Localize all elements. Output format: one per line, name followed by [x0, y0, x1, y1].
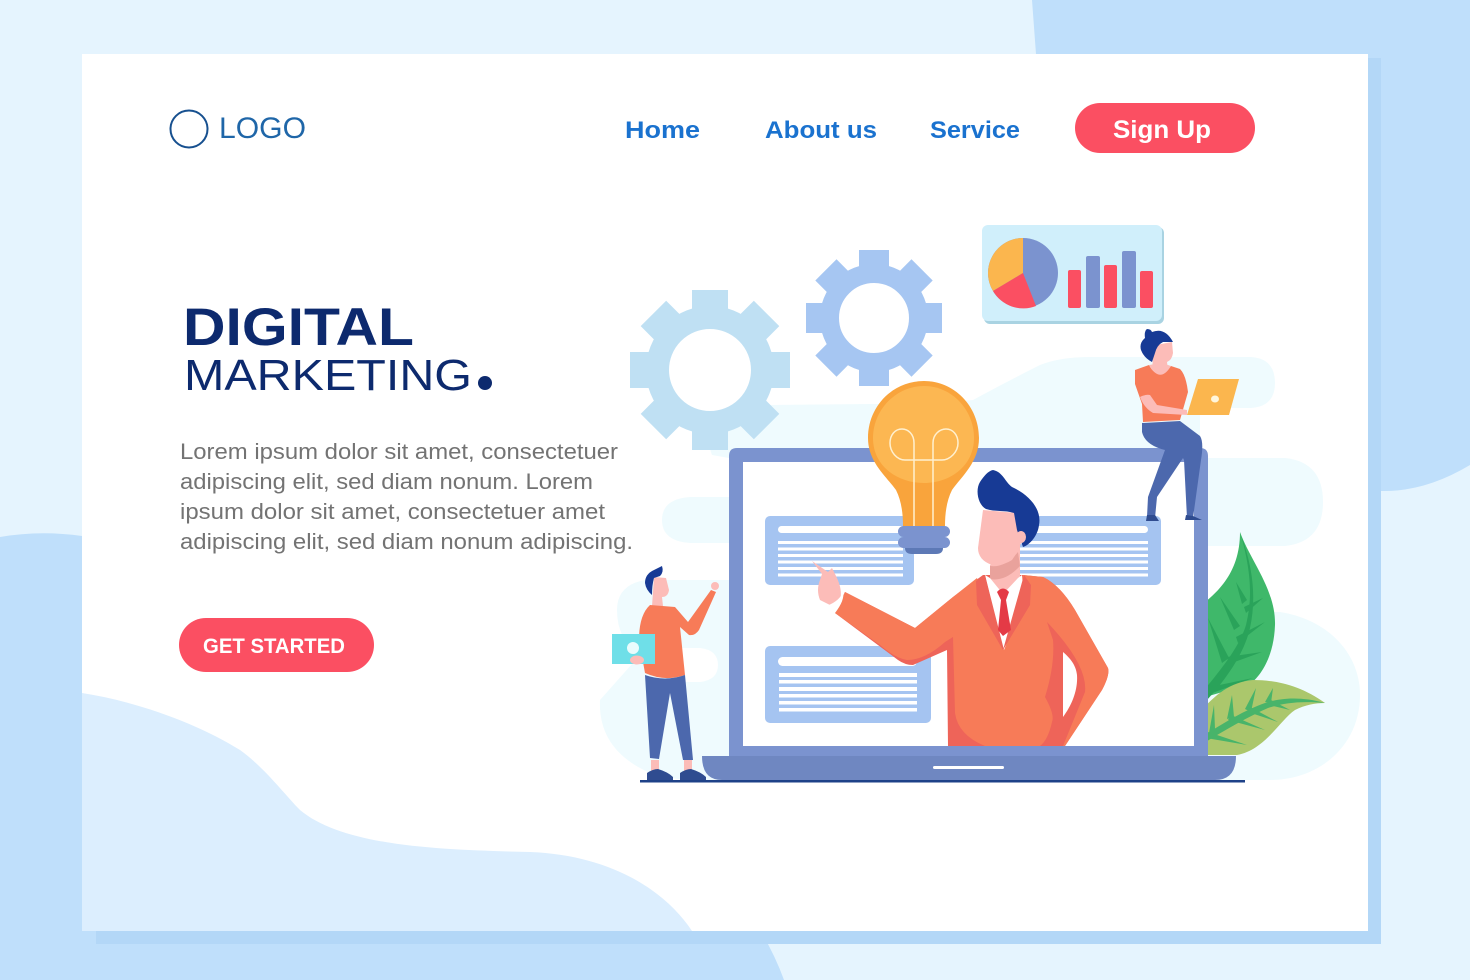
title: DIGITAL [183, 298, 414, 357]
person: standing with tablet [612, 566, 719, 780]
title: MARKETING [184, 351, 472, 400]
laptop base [702, 756, 1236, 780]
man hair [978, 470, 1039, 547]
ground line [640, 780, 1245, 782]
leaf: large green [1195, 532, 1275, 700]
sitting person trousers [1142, 421, 1202, 518]
gear: blue [806, 250, 942, 386]
laptop [640, 448, 1245, 782]
bulb glass [868, 381, 979, 526]
man lapels [976, 575, 1031, 650]
white card [82, 54, 1368, 931]
sitting person neck and face [1152, 342, 1173, 370]
navigation [625, 117, 1020, 144]
man jacket base [835, 575, 1108, 746]
standing person shoes [647, 769, 706, 780]
standing person neck and face [652, 577, 669, 606]
man face [978, 510, 1022, 565]
card blob: bottom left [82, 693, 692, 931]
body paragraph: adipiscing elit, sed diam nonum adipiscing. [180, 529, 633, 554]
text card: upper right [1012, 516, 1161, 585]
chart panel [982, 225, 1164, 324]
logo: LOGO [219, 112, 306, 145]
laptop notch [933, 766, 1004, 769]
sitting person shirt [1135, 365, 1188, 422]
white notch in backdrop near standing person [680, 648, 718, 682]
logo [170, 110, 306, 148]
man ear [1016, 531, 1026, 543]
sitting person arm [1140, 395, 1187, 415]
light bulb [868, 381, 979, 554]
tablet [612, 634, 655, 664]
laptop screen frame [729, 448, 1208, 760]
yellow laptop dot [1211, 396, 1219, 402]
standing person raised hand [711, 582, 719, 590]
tablet dot [627, 642, 639, 654]
man jacket highlight [835, 575, 1108, 746]
navigation: About us [765, 117, 877, 144]
bulb highlight [873, 386, 974, 483]
body paragraph [180, 439, 633, 554]
sitting person shoes [1146, 515, 1202, 521]
body paragraph: adipiscing elit, sed diam nonum. Lorem [180, 469, 593, 494]
standing person sweater [639, 590, 716, 678]
body paragraph: Lorem ipsum dolor sit amet, consectetuer [180, 439, 618, 464]
leaf: small lime [1200, 680, 1325, 755]
standing person trousers [645, 675, 693, 760]
sign up button: Sign Up [1113, 116, 1211, 144]
yellow laptop [1187, 379, 1239, 415]
person: sitting with laptop [1135, 329, 1239, 521]
standing person hand on tablet [630, 656, 644, 664]
bulb filament [890, 429, 958, 526]
background blob: bottom left [0, 533, 784, 980]
card shadow [96, 58, 1381, 944]
background blob: top right [1032, 0, 1470, 491]
get started button: GET STARTED [203, 635, 345, 658]
laptop screen [743, 462, 1194, 746]
sign up button [1075, 103, 1255, 153]
man cuff [829, 592, 843, 613]
sitting person hair [1140, 329, 1173, 362]
standing person hair [645, 566, 663, 595]
bulb base [898, 526, 950, 554]
title [183, 298, 492, 400]
man tie [997, 588, 1011, 636]
man hand [812, 561, 841, 605]
text card: lower [765, 646, 931, 723]
pie chart [988, 238, 1058, 308]
bar chart [1068, 251, 1153, 308]
sitting person neckline [1149, 364, 1171, 375]
body paragraph: ipsum dolor sit amet, consectetuer amet [180, 499, 605, 524]
presenter man [812, 470, 1108, 746]
navigation: Home [625, 117, 700, 144]
standing person ankles [651, 760, 692, 771]
text card: upper left [765, 516, 918, 585]
man shirt [985, 575, 1024, 650]
navigation: Service [930, 117, 1020, 144]
pale illustration backdrop [600, 357, 1360, 780]
man neck shadow [990, 552, 1020, 579]
gear: light [630, 290, 790, 450]
man neck [990, 545, 1020, 600]
get started button [179, 618, 374, 672]
